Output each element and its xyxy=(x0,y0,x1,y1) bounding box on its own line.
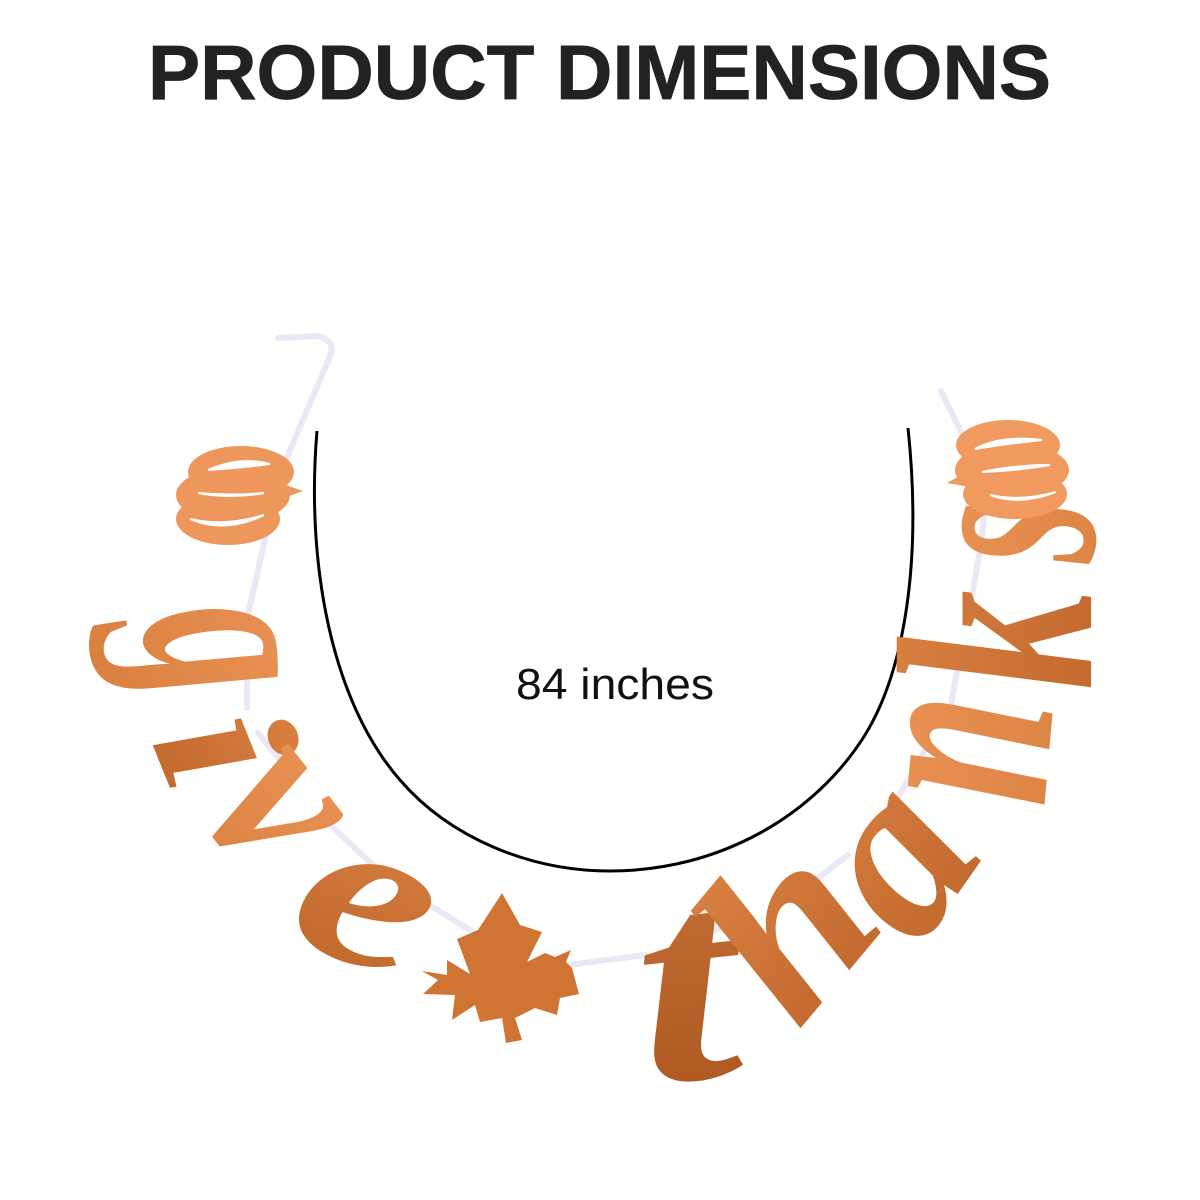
letter k: k xyxy=(841,590,1152,690)
pumpkin right xyxy=(947,420,1069,519)
letter n: n xyxy=(779,680,1119,814)
title: PRODUCT DIMENSIONS xyxy=(148,30,1051,116)
letter v: v xyxy=(153,675,431,921)
dimension curve xyxy=(314,428,913,871)
pumpkin left xyxy=(176,446,303,545)
letter e: e xyxy=(264,753,479,1029)
dimension label: 84 inches xyxy=(516,660,714,709)
letter a: a xyxy=(744,728,1030,979)
banner ribbon xyxy=(247,336,985,965)
letter g: g xyxy=(83,565,394,719)
banner: give thanks xyxy=(83,420,1155,1146)
letter i: i xyxy=(110,673,341,818)
icon: maple leaf xyxy=(422,893,579,1043)
letter h: h xyxy=(641,790,929,1065)
letter s: s xyxy=(846,501,1155,565)
letter t: t xyxy=(618,815,764,1146)
